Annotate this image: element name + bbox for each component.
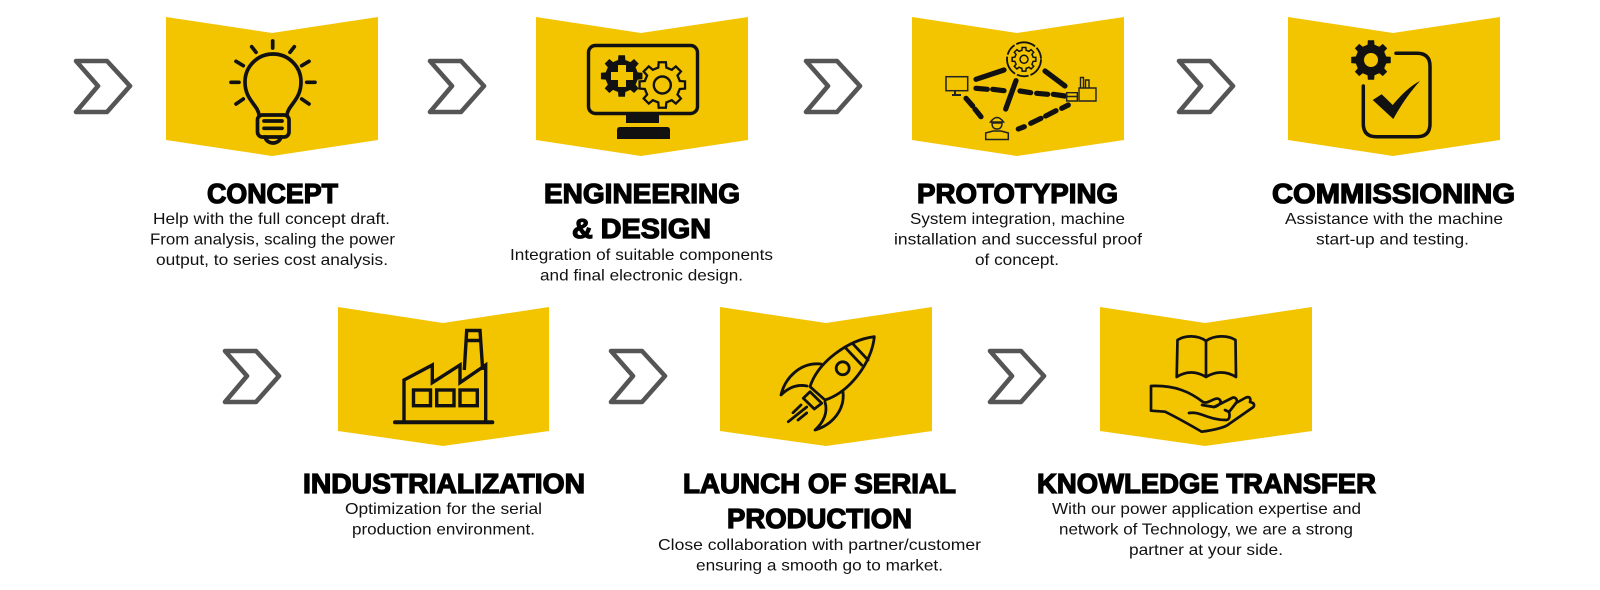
arrow 6 [611,351,665,402]
banner [1100,307,1312,446]
icon: factory [395,330,492,422]
panel: commissioning [1272,17,1515,248]
icon: gear and checklist [1351,40,1430,137]
heading: COMMISSIONING [1272,178,1515,209]
description: With our power application expertise and [1052,501,1361,518]
banner [912,17,1124,156]
description [1285,211,1503,248]
description: Integration of suitable components [510,247,773,264]
panel: engineering and design [510,17,773,284]
icon: connected system network [946,42,1096,139]
heading: PRODUCTION [727,503,912,534]
panel: launch of serial production [658,307,982,574]
description [345,501,542,538]
description: production environment. [352,522,535,538]
heading: KNOWLEDGE TRANSFER [1037,468,1376,499]
arrow 4 [1179,61,1233,112]
heading [544,178,740,244]
icon: hand holding book [1151,336,1254,432]
panel: industrialization [303,307,585,538]
heading: CONCEPT [207,178,338,209]
heading: ENGINEERING [544,178,740,209]
description: and final electronic design. [540,268,743,284]
panel: concept [150,17,396,269]
description: Assistance with the machine [1285,211,1503,228]
icon: monitor with gears [588,46,698,139]
description: Close collaboration with partner/customer [658,537,982,554]
arrow 3 [806,61,860,112]
description: Help with the full concept draft. [153,211,390,228]
description: ensuring a smooth go to market. [696,558,943,574]
description: network of Technology, we are a strong [1059,522,1353,538]
banner [338,307,549,446]
description: installation and successful proof [894,232,1143,248]
description [1052,501,1361,559]
description: Optimization for the serial [345,501,542,518]
panel: prototyping [894,17,1143,269]
arrow 1 [76,61,130,112]
arrow 2 [430,61,484,112]
description: of concept. [975,252,1059,269]
description: output, to series cost analysis. [156,252,388,269]
banner [1288,17,1500,156]
heading: PROTOTYPING [917,178,1118,209]
description [894,211,1143,269]
heading: INDUSTRIALIZATION [303,468,585,499]
heading: LAUNCH OF SERIAL [683,468,956,499]
panel: knowledge transfer [1037,307,1376,559]
arrow 7 [990,351,1044,402]
description: partner at your side. [1129,542,1283,559]
heading [683,468,956,534]
icon: rocket [781,337,874,430]
description: start-up and testing. [1316,232,1469,248]
description [510,247,773,284]
heading: & DESIGN [572,213,711,244]
description [658,537,982,574]
banner [536,17,748,156]
description: System integration, machine [910,211,1125,228]
arrow 5 [225,351,279,402]
description [150,211,396,269]
banner [166,17,378,156]
icon: light bulb [231,41,315,143]
description: From analysis, scaling the power [150,232,396,248]
banner [720,307,932,446]
